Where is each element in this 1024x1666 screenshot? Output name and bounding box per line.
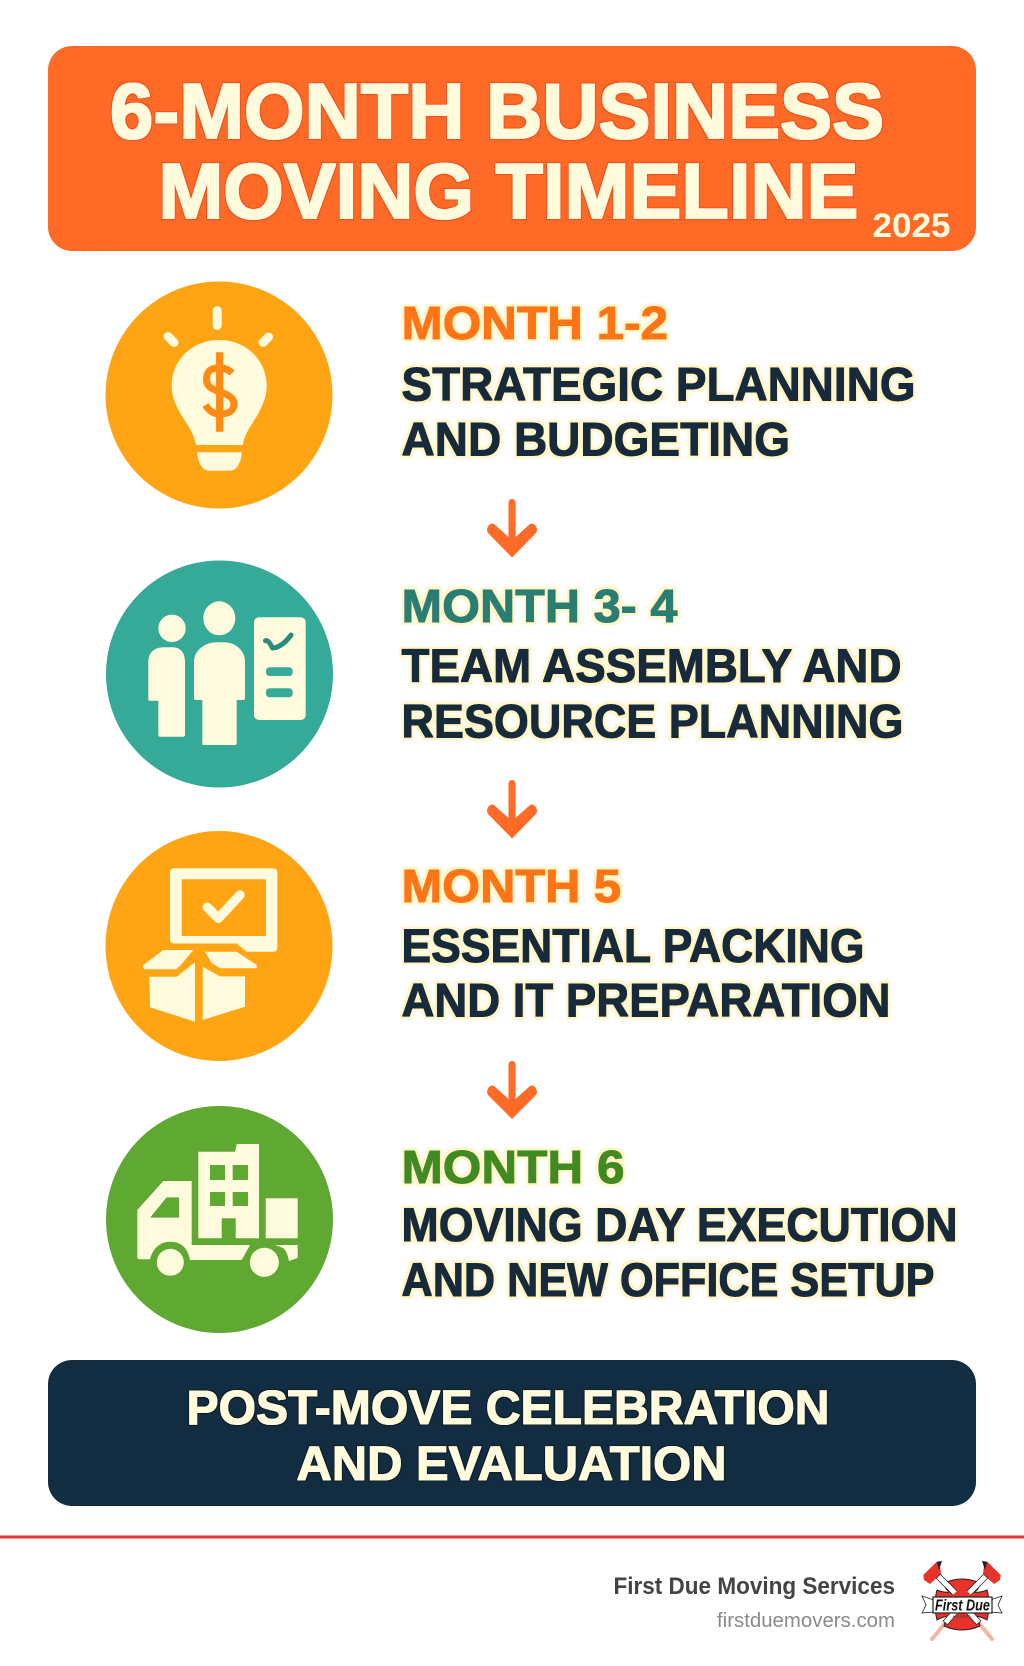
step heading: RESOURCE PLANNING [402, 696, 904, 748]
header banner [48, 46, 976, 251]
icon: light bulb with dollar sign [106, 282, 332, 508]
logo: First Due [922, 1561, 1002, 1639]
step heading: AND BUDGETING [402, 414, 790, 466]
step heading [402, 1199, 958, 1307]
arrow 3 [487, 1061, 537, 1119]
step heading: STRATEGIC PLANNING [402, 358, 916, 412]
footer divider line [0, 1536, 1024, 1538]
title: MOVING TIMELINE [158, 147, 858, 235]
arrow 2 [487, 780, 537, 838]
panel heading [186, 1382, 830, 1491]
step heading: AND NEW OFFICE SETUP [402, 1254, 934, 1307]
panel heading: POST-MOVE CELEBRATION [186, 1382, 830, 1435]
title: 6-MONTH BUSINESS [110, 67, 884, 155]
step heading: TEAM ASSEMBLY AND [402, 640, 902, 693]
footer company name: First Due Moving Services [614, 1573, 895, 1600]
footer website: firstduemovers.com [717, 1610, 895, 1632]
step heading [402, 920, 890, 1028]
step 4: month 6 [106, 1106, 958, 1333]
step heading: AND IT PREPARATION [402, 974, 890, 1028]
logo: First Due: MOVERS [953, 1615, 972, 1619]
icon: monitor and packing box [106, 831, 332, 1061]
arrow 1 [487, 499, 537, 558]
icon: moving truck with building [106, 1106, 333, 1333]
step 1: month 1-2 [106, 282, 916, 508]
panel heading: AND EVALUATION [296, 1438, 726, 1491]
panel: post-move [48, 1360, 976, 1506]
month label: MONTH 6 [402, 1141, 624, 1193]
title [110, 67, 884, 235]
logo: First Due: First Due [935, 1598, 990, 1614]
month label: MONTH 5 [402, 860, 621, 912]
step 3: month 5 [106, 831, 890, 1061]
step heading [402, 358, 916, 466]
step 2: month 3-4 [106, 560, 904, 788]
step heading [402, 640, 904, 748]
step heading: ESSENTIAL PACKING [402, 920, 864, 973]
step heading: MOVING DAY EXECUTION [402, 1199, 958, 1252]
month label: MONTH 1-2 [402, 297, 668, 349]
month label: MONTH 3- 4 [402, 580, 678, 632]
year label: 2025 [872, 207, 950, 245]
icon: team with checklist [106, 560, 333, 788]
